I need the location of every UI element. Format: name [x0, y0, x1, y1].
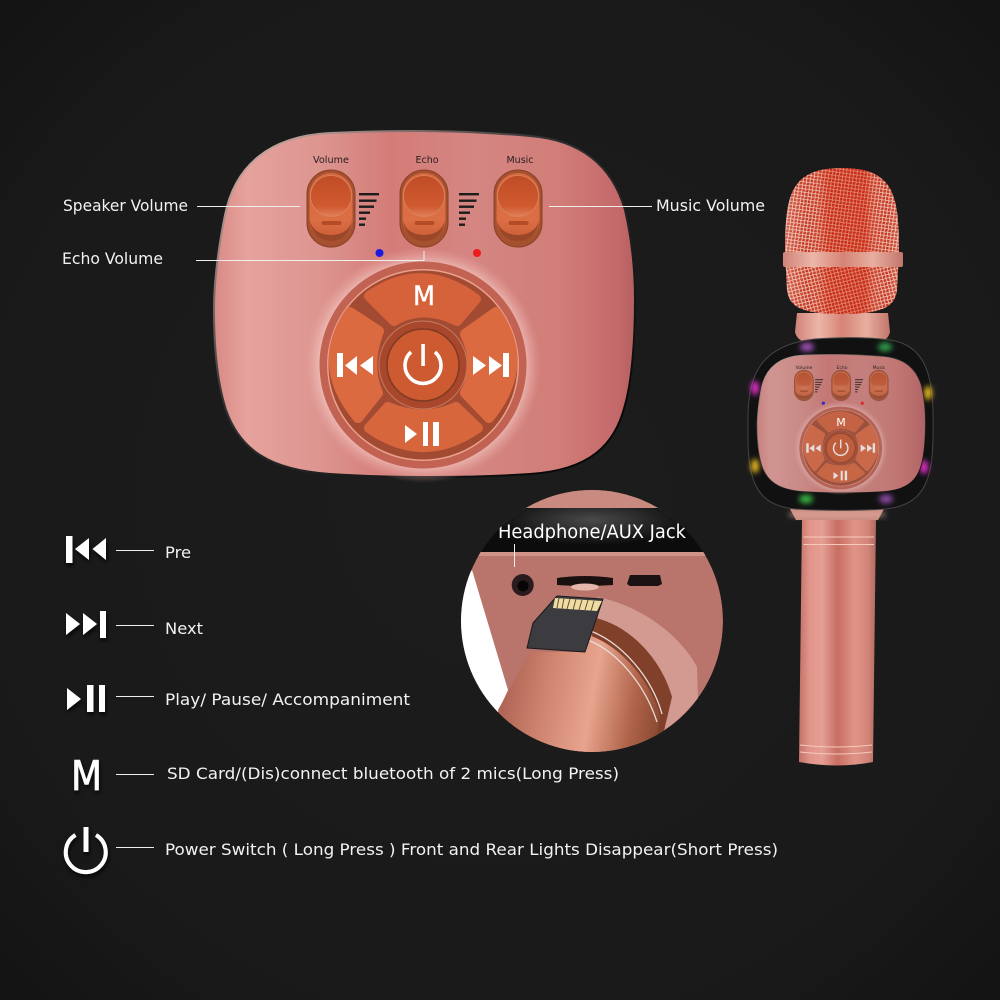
icon: M: M: [71, 752, 102, 800]
label: slider names: Music: [506, 155, 534, 166]
top body: [522, 490, 662, 510]
mic handle inset: [498, 636, 660, 752]
legend row: Next: Next: [165, 619, 203, 638]
legend row: Power: [66, 827, 778, 872]
icon: next: [66, 611, 106, 638]
mic metal ring: [783, 252, 903, 267]
collar: [597, 597, 698, 746]
mic mesh head: [785, 168, 899, 314]
panel: enlarged control face: [214, 131, 635, 483]
mic small control face: Volume: [796, 365, 813, 371]
mic handle: [789, 509, 885, 766]
label: Headphone/AUX Jack: Headphone/AUX Jack: [498, 522, 686, 543]
port wall: [478, 552, 706, 556]
mic small control face: M: [836, 416, 846, 429]
LED lights: [751, 342, 932, 504]
legend row: Play/Pause: Play/ Pause/ Accompaniment: [165, 690, 410, 709]
inset photo: ports and SD card: [455, 488, 725, 770]
mic small control face: Music: [873, 365, 886, 371]
legend row: M: [71, 752, 619, 800]
audio jack: [512, 574, 534, 596]
label: slider names: [313, 155, 534, 166]
micro USB port: [627, 575, 662, 586]
icon: play pause: [67, 685, 105, 712]
mic neck: [795, 313, 890, 342]
callout: Music Volume: Music Volume: [656, 196, 765, 215]
callout: Speaker Volume: Speaker Volume: [63, 196, 188, 215]
legend row: Pre: [66, 536, 191, 563]
mic black LED bezel: [748, 338, 933, 510]
label line: [514, 544, 515, 567]
black band: [480, 508, 703, 552]
copper band: [592, 618, 672, 739]
callout: Echo Volume: [62, 249, 424, 268]
legend row: Pre: Pre: [165, 543, 191, 562]
SD slot: [557, 576, 613, 590]
SD card: [527, 596, 603, 652]
callout: Echo Volume: Echo Volume: [62, 249, 163, 268]
microphone product image: [748, 165, 933, 766]
legend row: Next: [66, 611, 203, 638]
mic small control face: [757, 354, 926, 495]
label: slider names: Echo: [416, 155, 438, 166]
mic small control face: Echo: [837, 365, 848, 371]
legend row: M: SD Card/(Dis)connect bluetooth of 2 mics(Long Press): [167, 764, 619, 783]
legend row: Play/Pause: [67, 685, 410, 712]
icon: previous: [66, 536, 106, 563]
button label: M: M: [413, 281, 435, 312]
icon: power: [66, 827, 106, 872]
legend row: Power: Power Switch ( Long Press ) Front and Rear Lights Disappear(Short Press): [165, 840, 778, 859]
silver rings: [588, 630, 662, 722]
label: slider names: Volume: [313, 155, 349, 166]
white wedge: [461, 570, 508, 712]
